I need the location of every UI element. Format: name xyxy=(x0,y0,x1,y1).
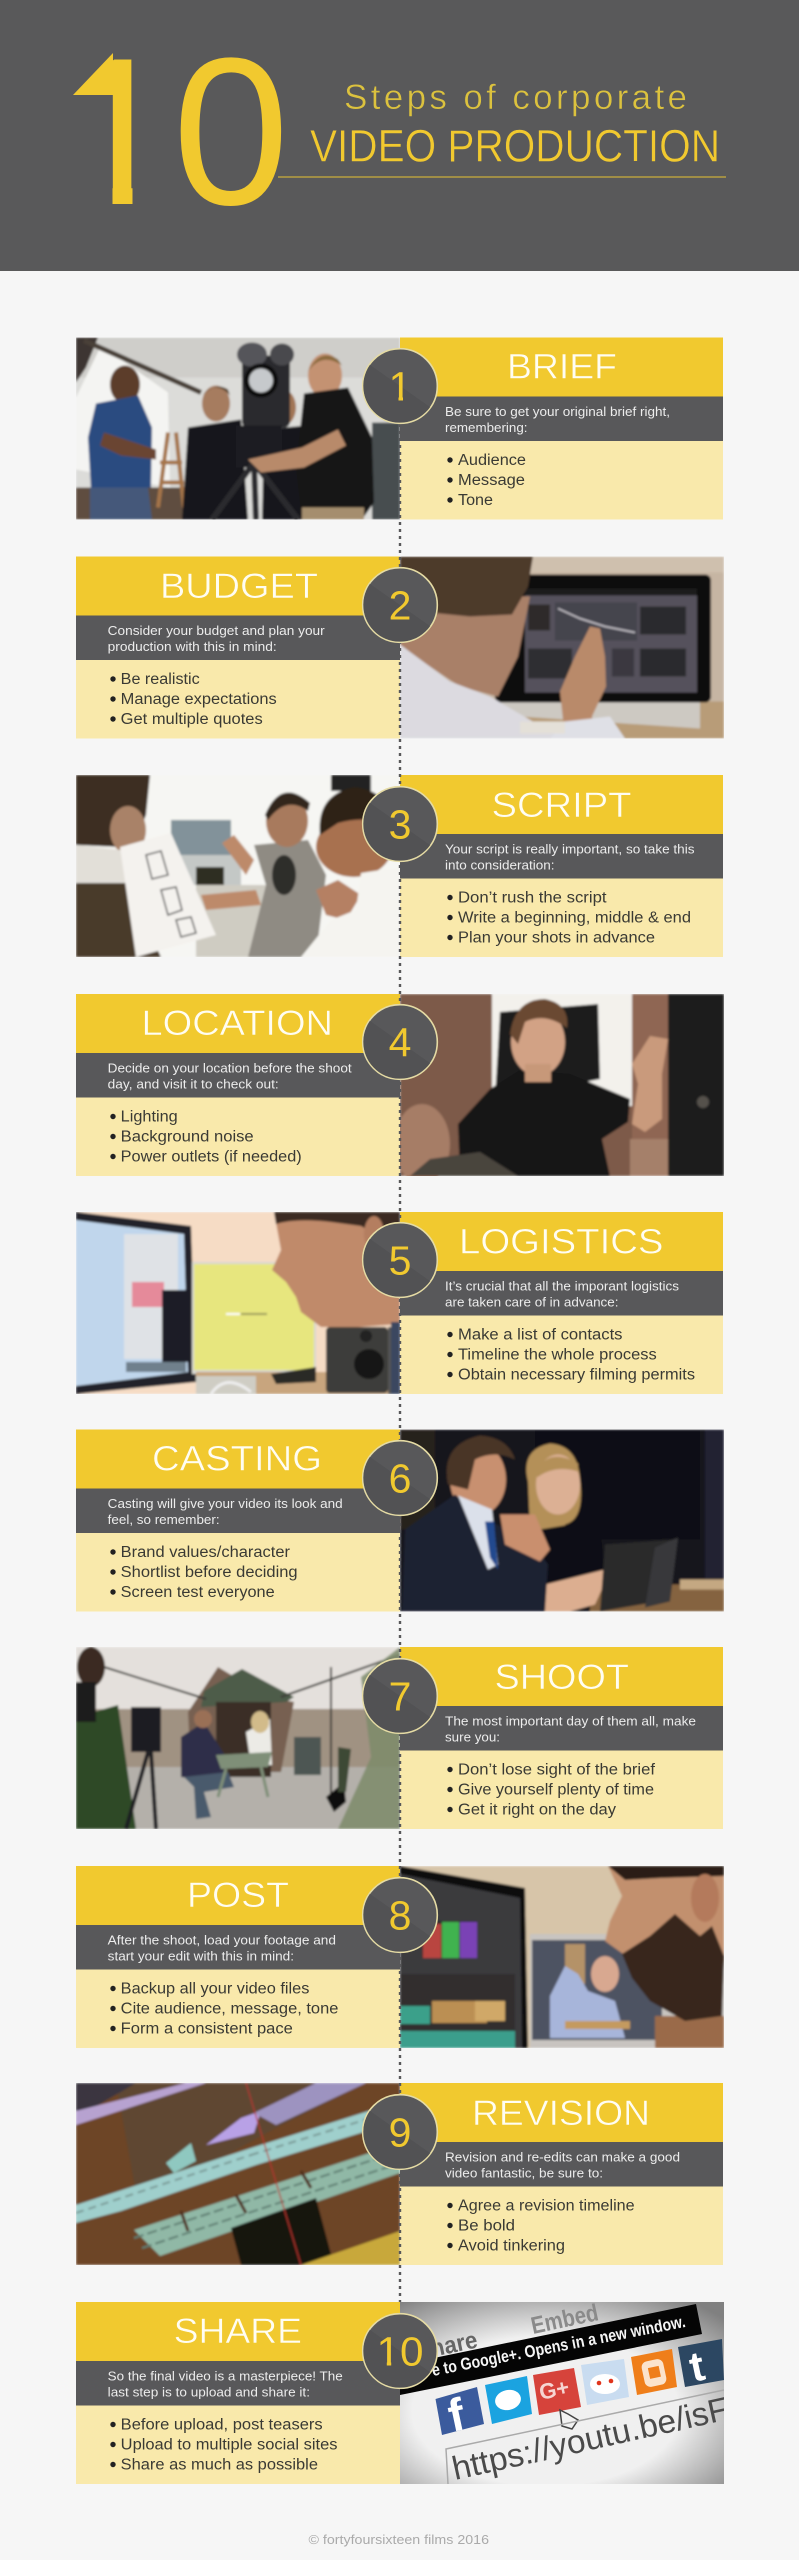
bullet list xyxy=(76,1098,400,1176)
bullet list: Form a consistent pace xyxy=(121,2020,293,2038)
footer copyright: © fortyfoursixteen films 2016 xyxy=(308,2532,489,2547)
intro band: Casting will give your video its look and xyxy=(108,1496,343,1511)
step number badge 9 xyxy=(359,2095,437,2174)
step number badge 3: 3 xyxy=(389,802,411,848)
intro band: Revision and re-edits can make a good xyxy=(445,2150,680,2164)
dotted centre timeline xyxy=(399,424,401,2302)
intro band: into consideration: xyxy=(445,858,554,872)
bullet list xyxy=(400,441,723,520)
intro band: sure you: xyxy=(445,1730,500,1744)
intro band: After the shoot, load your footage and xyxy=(108,1932,336,1948)
social share icons: f xyxy=(443,2388,470,2442)
heading band xyxy=(76,1430,400,1488)
heading band xyxy=(76,2302,400,2361)
panel 10: share xyxy=(76,2299,732,2487)
bullet list xyxy=(76,2406,400,2484)
intro band xyxy=(76,2361,400,2406)
heading band xyxy=(400,2083,723,2142)
heading band xyxy=(400,775,723,834)
intro band: Decide on your location before the shoot xyxy=(108,1060,352,1076)
social share icons: t xyxy=(685,2342,709,2391)
bullet list xyxy=(76,1533,400,1612)
intro band: are taken care of in advance: xyxy=(445,1294,618,1310)
photo: film crew around a camera xyxy=(76,338,400,520)
bullet list: Make a list of contacts xyxy=(458,1326,623,1344)
photo: two people watching a laptop xyxy=(400,1430,724,1612)
photo: director gesturing in brick room xyxy=(394,994,724,1184)
bullet list xyxy=(400,2186,723,2265)
bullet list: Before upload, post teasers xyxy=(121,2416,323,2434)
photo: YouTube share buttons: e to Google+. Opens in a new window. xyxy=(430,2312,687,2380)
panel 3: script xyxy=(76,775,723,957)
step number badge 6 xyxy=(359,1441,437,1520)
bullet list: Lighting xyxy=(121,1108,178,1126)
intro band: remembering: xyxy=(445,420,528,435)
bullet list: Get it right on the day xyxy=(458,1802,616,1818)
photo: YouTube share buttons: Share xyxy=(414,2327,480,2366)
photo: angled editing timeline xyxy=(76,2083,400,2265)
intro band: The most important day of them all, make xyxy=(445,1714,696,1728)
step number badge 2: 2 xyxy=(389,582,411,628)
step number badge 3 xyxy=(359,787,437,866)
photo: man pointing at dashboard on monitor xyxy=(400,556,724,738)
title line: steps of corporate: Steps of corporate xyxy=(344,78,687,117)
heading band xyxy=(400,1212,723,1271)
intro band: production with this in mind: xyxy=(108,639,277,654)
cursor xyxy=(560,2410,578,2429)
bullet list: Timeline the whole process xyxy=(458,1346,657,1364)
bullet list xyxy=(400,1316,723,1394)
intro band: feel, so remember: xyxy=(108,1512,220,1527)
heading: REVISION: REVISION xyxy=(472,2094,650,2133)
intro band xyxy=(400,396,723,441)
step number badge 8 xyxy=(359,1878,437,1957)
bullet list: Background noise xyxy=(121,1128,254,1146)
bullet list: Get multiple quotes xyxy=(121,711,263,728)
heading: LOGISTICS: LOGISTICS xyxy=(459,1222,664,1262)
heading band xyxy=(76,994,400,1053)
bullet list: Cite audience, message, tone xyxy=(121,2000,338,2018)
bullet list xyxy=(76,660,400,738)
bullet list: Manage expectations xyxy=(121,691,277,708)
intro band xyxy=(76,616,400,660)
step number badge 5: 5 xyxy=(389,1238,411,1284)
intro band xyxy=(76,1053,400,1098)
intro band: Be sure to get your original brief right, xyxy=(445,404,670,419)
step number badge 7 xyxy=(359,1659,437,1738)
panel 6: casting xyxy=(76,1430,724,1612)
header banner xyxy=(0,0,799,271)
title line: video production: VIDEO PRODUCTION xyxy=(310,120,720,172)
bullet list xyxy=(76,1970,400,2048)
photo: interview set in a garden shed xyxy=(76,1647,400,1829)
intro band xyxy=(400,1706,723,1750)
photo: editor looking at two screens xyxy=(76,1212,400,1394)
panel 5: logistics xyxy=(76,1212,723,1394)
intro band: Consider your budget and plan your xyxy=(108,623,325,638)
bullet list: Power outlets (if needed) xyxy=(121,1148,302,1166)
heading band xyxy=(76,556,400,616)
step number badge 4: 4 xyxy=(389,1020,411,1066)
bullet list: Be bold xyxy=(458,2218,515,2234)
social share icons: G+ xyxy=(537,2374,571,2405)
photo: three men reviewing a storyboard xyxy=(76,775,400,957)
step number badge 5 xyxy=(359,1223,437,1302)
heading band xyxy=(400,1647,723,1706)
heading: BRIEF: BRIEF xyxy=(507,348,617,386)
bullet list xyxy=(400,878,723,957)
intro band xyxy=(400,834,723,878)
bullet list: Screen test everyone xyxy=(121,1584,275,1601)
heading band xyxy=(400,338,723,396)
intro band: day, and visit it to check out: xyxy=(108,1076,279,1092)
intro band: video fantastic, be sure to: xyxy=(445,2166,603,2180)
panel 7: shoot xyxy=(76,1647,723,1829)
panel 4: location xyxy=(76,994,724,1184)
intro band: last step is to upload and share it: xyxy=(108,2384,310,2400)
step number badge 10: 10 xyxy=(376,2328,424,2374)
bullet list xyxy=(400,1750,723,1829)
bullet list: Tone xyxy=(458,492,493,509)
heading: SHARE: SHARE xyxy=(174,2312,302,2351)
heading: BUDGET: BUDGET xyxy=(160,567,318,606)
bullet list: Agree a revision timeline xyxy=(458,2198,635,2214)
photo: YouTube share buttons: Embed xyxy=(529,2299,601,2340)
social share icons xyxy=(436,2339,724,2442)
bullet list: Don’t lose sight of the brief xyxy=(458,1762,656,1778)
heading band xyxy=(76,1866,400,1925)
photo: YouTube share buttons xyxy=(400,2299,732,2487)
step number badge 7: 7 xyxy=(389,1674,411,1720)
heading: SCRIPT: SCRIPT xyxy=(492,786,632,825)
intro band xyxy=(400,2142,723,2186)
intro band xyxy=(400,1271,723,1316)
photo: YouTube share buttons: https://youtu.be/isF xyxy=(449,2390,732,2487)
bullet list: Upload to multiple social sites xyxy=(121,2436,338,2454)
step number badge 9: 9 xyxy=(389,2110,411,2156)
title number 10: 1 xyxy=(60,14,177,249)
step number badge 1 xyxy=(359,349,437,428)
bullet list: Share as much as possible xyxy=(121,2456,318,2474)
bullet list: Avoid tinkering xyxy=(458,2238,565,2254)
intro band xyxy=(76,1925,400,1970)
bullet list: Be realistic xyxy=(121,671,200,688)
photo: editor at timeline and scopes xyxy=(400,1866,724,2048)
step number badge 6: 6 xyxy=(389,1456,411,1502)
title number 10 xyxy=(73,53,282,206)
intro band: It’s crucial that all the imporant logistics xyxy=(445,1278,680,1294)
step number badge 10 xyxy=(359,2314,437,2393)
title number 10: 0 xyxy=(172,14,289,249)
bullet list: Shortlist before deciding xyxy=(121,1564,298,1581)
intro band xyxy=(76,1488,400,1533)
bullet list: Plan your shots in advance xyxy=(458,930,655,946)
panel 1: brief xyxy=(76,338,723,520)
step number badge 8: 8 xyxy=(389,1892,411,1938)
heading: LOCATION: LOCATION xyxy=(142,1004,333,1043)
bullet list: Backup all your video files xyxy=(121,1980,310,1998)
panel 9: revision xyxy=(76,2083,723,2265)
intro band: start your edit with this in mind: xyxy=(108,1948,294,1964)
heading: CASTING: CASTING xyxy=(152,1440,322,1478)
heading: POST: POST xyxy=(187,1876,289,1915)
bullet list: Audience xyxy=(458,452,526,469)
bullet list: Brand values/character xyxy=(121,1544,290,1561)
intro band: Your script is really important, so take this xyxy=(445,842,695,856)
heading: SHOOT: SHOOT xyxy=(494,1658,629,1697)
step number badge 1: 1 xyxy=(389,364,411,410)
panel 2: budget xyxy=(76,556,724,738)
step number badge 2 xyxy=(359,568,437,647)
bullet list: Give yourself plenty of time xyxy=(458,1782,654,1798)
step number badge 4 xyxy=(359,1005,437,1084)
bullet list: Message xyxy=(458,472,525,489)
intro band: So the final video is a masterpiece! The xyxy=(108,2368,343,2384)
bullet list: Write a beginning, middle & end xyxy=(458,910,691,926)
panel 8: post xyxy=(76,1866,724,2048)
bullet list: Don’t rush the script xyxy=(458,890,607,906)
bullet list: Obtain necessary filming permits xyxy=(458,1366,695,1384)
